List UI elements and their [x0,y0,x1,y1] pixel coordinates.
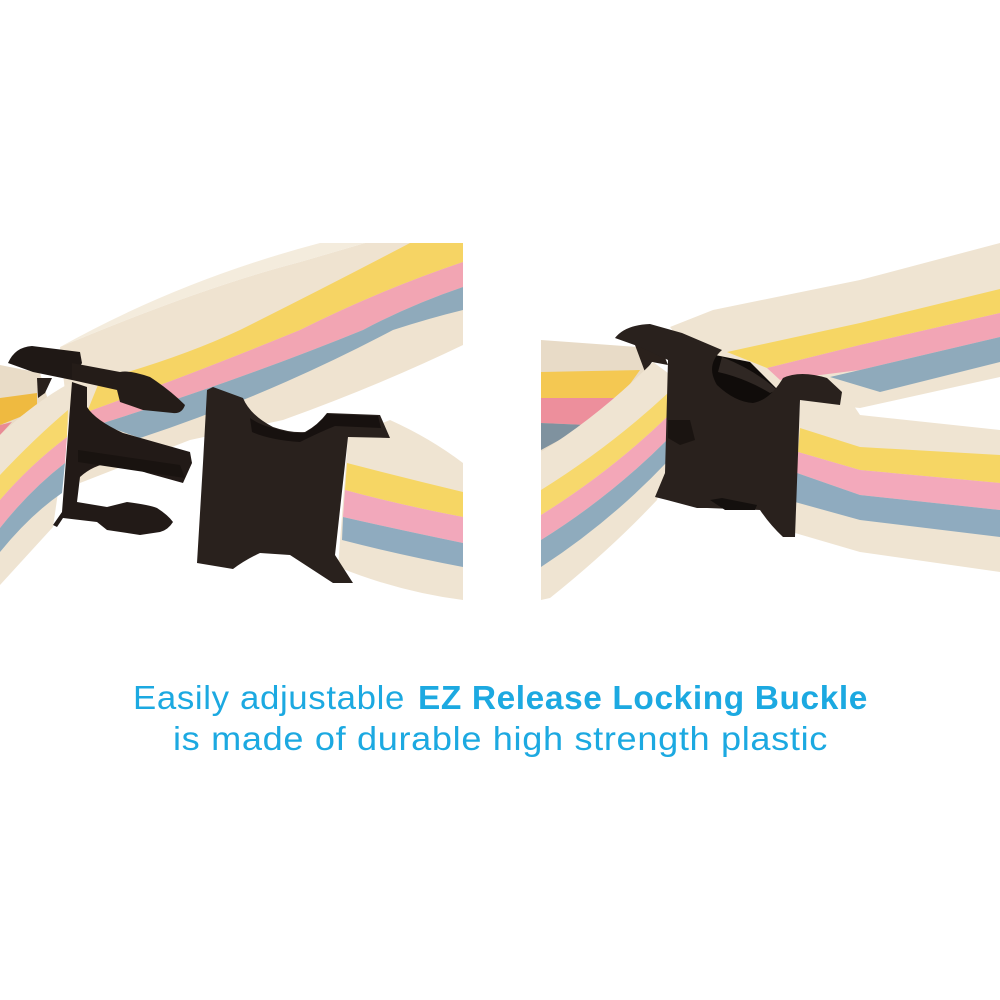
caption [133,679,868,757]
caption line 1 [133,679,868,716]
belt: upper-right strap [670,243,1000,408]
photo: closed buckle on striped belt [541,243,1000,600]
belt: back-left strap [541,340,668,452]
buckle: female clip [197,387,390,583]
photo: open buckle on striped belt [0,243,463,600]
belt: back-left strap end [0,365,52,440]
belt: front-left strap [541,362,668,600]
belt: right strap [338,420,463,600]
belt: upper strap behind buckle [60,243,463,483]
buckle: male clip [8,346,192,535]
caption line 1: Easily adjustable [133,679,405,716]
belt: front-right strap [795,385,1000,572]
belt: front-left strap [0,383,70,585]
buckle: closed clip [615,324,842,537]
caption line 1: EZ Release Locking Buckle [418,679,868,716]
caption line 2: is made of durable high strength plastic [173,720,828,757]
